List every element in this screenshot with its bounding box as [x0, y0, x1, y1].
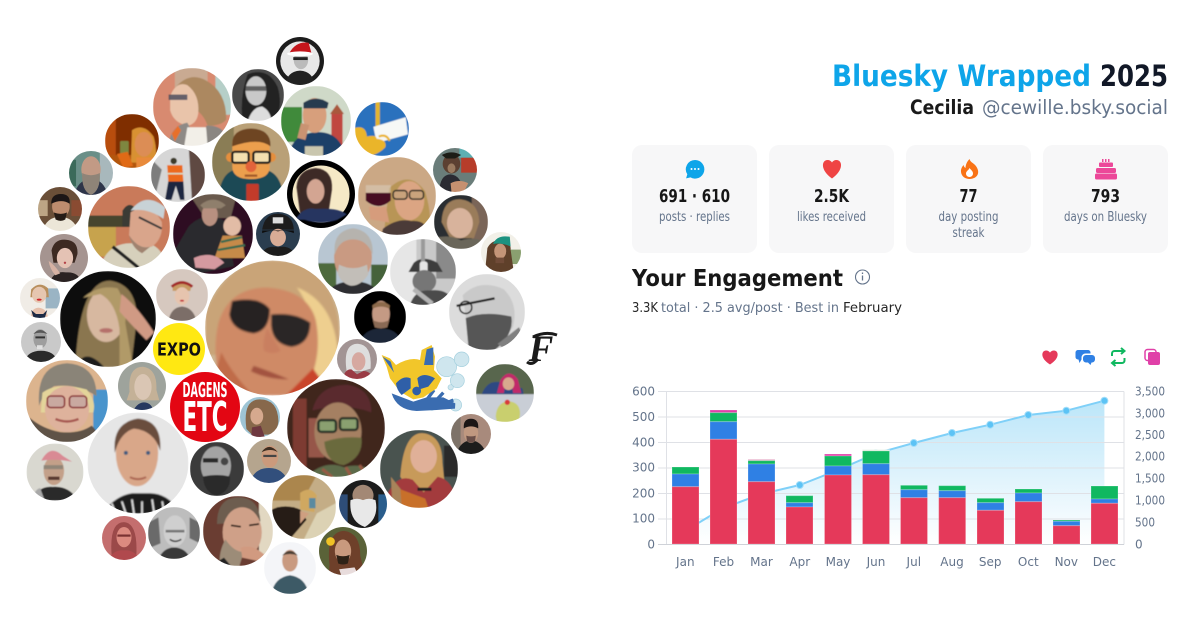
stat value: 793 — [1091, 186, 1120, 207]
avatar: woman with red lips — [20, 278, 60, 318]
avatar: man with cap and glasses — [88, 186, 170, 268]
panel: posts and replies stat card — [632, 145, 757, 253]
avatar: F logo: F — [528, 329, 554, 370]
avatar: smiling woman close-up — [434, 195, 488, 249]
right axis labels: 3,000 — [1135, 406, 1165, 420]
month labels: Apr — [789, 555, 810, 569]
right axis labels: 1,500 — [1135, 472, 1165, 486]
stat value: 77 — [960, 186, 978, 207]
avatar: woman in beanie — [256, 212, 300, 256]
avatar: Dagens ETC logo: DAGENS — [182, 378, 228, 402]
month labels — [675, 555, 1116, 569]
month labels: Jul — [906, 555, 921, 569]
panel: likes stat card — [769, 145, 894, 253]
left axis labels — [632, 384, 655, 552]
avatar: woman with red headband — [156, 269, 208, 321]
avatar: woman with red glasses tint — [102, 516, 146, 560]
title: Bluesky Wrapped 2025: Bluesky Wrapped — [832, 59, 1091, 93]
avatar: older woman with silver hair — [337, 339, 377, 379]
avatar: bald man with long beard — [69, 151, 113, 195]
avatar: man with dark hair and beard — [38, 187, 82, 231]
avatar: woman in profile with glasses — [153, 68, 231, 146]
avatar: Expo logo: EXPO — [157, 340, 201, 360]
left axis labels: 500 — [632, 410, 655, 424]
stat value: 2.5K — [814, 186, 850, 207]
right axis labels — [1135, 384, 1165, 552]
Apr bar — [786, 496, 813, 544]
title: Bluesky Wrapped 2025: 2025 — [1100, 59, 1168, 93]
month labels: Jan — [675, 555, 695, 569]
heading: Your Engagement: Your Engagement — [631, 264, 843, 292]
icon: reposts arrows — [1112, 348, 1124, 366]
month labels: Nov — [1055, 555, 1078, 569]
icon: chat bubble — [686, 160, 704, 179]
Feb bar — [710, 410, 737, 544]
left axis labels: 0 — [647, 538, 655, 552]
avatar: father with baby — [173, 194, 253, 274]
Nov bar — [1053, 520, 1080, 544]
subtitle: name and handle: Cecilia — [910, 96, 974, 119]
month labels: Sep — [979, 555, 1002, 569]
avatar: man with sunglasses and red barn — [281, 86, 351, 156]
subtitle: name and handle: @cewille.bsky.social — [982, 96, 1168, 119]
right axis labels: 2,000 — [1135, 450, 1165, 464]
avatar: raccoon with bubbles — [382, 345, 469, 411]
stat label: days on Bluesky — [1064, 210, 1147, 225]
month labels: Jun — [866, 555, 885, 569]
avatar: blonde woman with hand in hair — [60, 271, 156, 367]
avatar: man with dark hair — [451, 414, 491, 454]
subtitle: name and handle — [910, 96, 1168, 119]
left axis labels: 400 — [632, 436, 655, 450]
avatar: monochrome man with nose guard — [390, 239, 456, 305]
month labels: Aug — [940, 555, 964, 569]
avatar: grey monochrome man — [21, 322, 61, 362]
Aug bar — [939, 486, 966, 544]
avatar: man in pink cap — [26, 444, 84, 500]
Sep bar — [977, 498, 1004, 544]
right axis labels: 0 — [1135, 538, 1143, 552]
right axis labels: 3,500 — [1135, 384, 1165, 398]
avatar: large portrait with sunglasses — [205, 260, 340, 396]
Jul bar — [900, 485, 928, 544]
avatar: man with green hat — [481, 232, 521, 272]
avatar: pale blonde woman — [118, 362, 166, 410]
icon: quotes copy — [1145, 350, 1160, 365]
left axis labels: 600 — [632, 384, 655, 398]
avatar: Dagens ETC logo: ETC — [182, 393, 228, 441]
panel: posting streak stat card — [906, 145, 1031, 253]
legend: chart series icons — [1042, 348, 1160, 366]
left axis labels: 300 — [632, 460, 655, 474]
Dec bar — [1091, 486, 1118, 544]
avatar: man with dog in pirate style — [433, 148, 477, 192]
Jun bar — [862, 450, 890, 544]
avatar: main man with patterned sweater — [88, 412, 188, 514]
text: engagement summary: 3.3K — [632, 300, 659, 316]
Mar bar — [748, 459, 775, 544]
avatar: black and white woman — [232, 69, 284, 121]
avatar: Expo logo — [153, 323, 205, 375]
avatar: engraving of bearded man — [190, 442, 244, 496]
icon: likes heart — [1042, 350, 1058, 364]
avatar: bald smiling man monochrome — [148, 507, 200, 559]
left axis labels: 100 — [632, 512, 655, 526]
avatar: man in blue shirt — [247, 439, 291, 483]
panel: days on Bluesky stat card — [1043, 145, 1168, 253]
avatar: woman with dog — [380, 430, 458, 508]
avatar: woman with hand to neck — [40, 234, 88, 282]
month labels: Oct — [1018, 555, 1039, 569]
May bar — [824, 454, 852, 544]
avatar: cartoon muppet man — [212, 123, 290, 201]
month labels: May — [826, 555, 850, 569]
stat label: likes received — [797, 210, 866, 225]
avatar: curly-haired woman — [240, 397, 280, 437]
icon: heart — [823, 160, 841, 178]
stat label: posts · replies — [659, 210, 730, 225]
avatar: orange safety vest in snow — [151, 148, 205, 202]
icon: info — [856, 270, 870, 284]
avatar: woman in black ring frame — [287, 160, 355, 228]
stat label second line: streak — [952, 226, 985, 241]
icon: flame — [961, 159, 978, 179]
avatar: woman with pink hair and cake — [476, 364, 534, 422]
avatar: woman with knit hat and glasses — [26, 360, 108, 442]
Jan bar — [672, 467, 699, 544]
stat value: 691 · 610 — [659, 186, 730, 207]
avatar: painted man with hat and glasses — [287, 379, 385, 477]
month labels: Feb — [713, 555, 734, 569]
right axis labels: 2,500 — [1135, 428, 1165, 442]
chart: monthly engagement stacked bars with cumulative line — [632, 384, 1165, 569]
avatar: man with white santa beard — [339, 480, 387, 528]
month labels: Dec — [1093, 555, 1116, 569]
stat label: day posting — [938, 210, 998, 225]
bars — [672, 410, 1118, 544]
panel: avatar bubble cluster — [20, 37, 557, 594]
avatar: long-haired man with flower — [319, 527, 367, 575]
right axis labels: 1,000 — [1135, 494, 1165, 508]
avatar: selfie blonde in black top — [272, 475, 336, 539]
text: engagement summary: total · 2.5 avg/post · Best in — [661, 300, 839, 316]
avatar: blue gift tag — [355, 102, 409, 156]
avatar: silver-haired man — [318, 224, 388, 294]
avatar: man in teal shirt — [264, 542, 316, 594]
avatar: selfie in orange light — [105, 114, 159, 168]
month labels: Mar — [750, 555, 773, 569]
text: engagement summary: February — [843, 300, 902, 316]
right axis labels: 500 — [1135, 516, 1155, 530]
icon: replies chat — [1076, 350, 1095, 365]
avatar: woman with red wine — [358, 157, 436, 235]
avatar: man on black background — [354, 291, 406, 343]
avatar: bald man with glasses and beard — [449, 274, 525, 350]
avatar: Dagens ETC logo — [170, 372, 240, 442]
Oct bar — [1015, 489, 1042, 544]
cumulative line — [685, 397, 1108, 531]
left axis labels: 200 — [632, 486, 655, 500]
avatar: santa hat portrait — [276, 37, 324, 85]
cumulative area — [685, 401, 1104, 544]
icon: birthday cake — [1095, 159, 1117, 180]
avatar: thinking man with beard — [203, 496, 273, 566]
text: engagement summary — [632, 300, 902, 316]
